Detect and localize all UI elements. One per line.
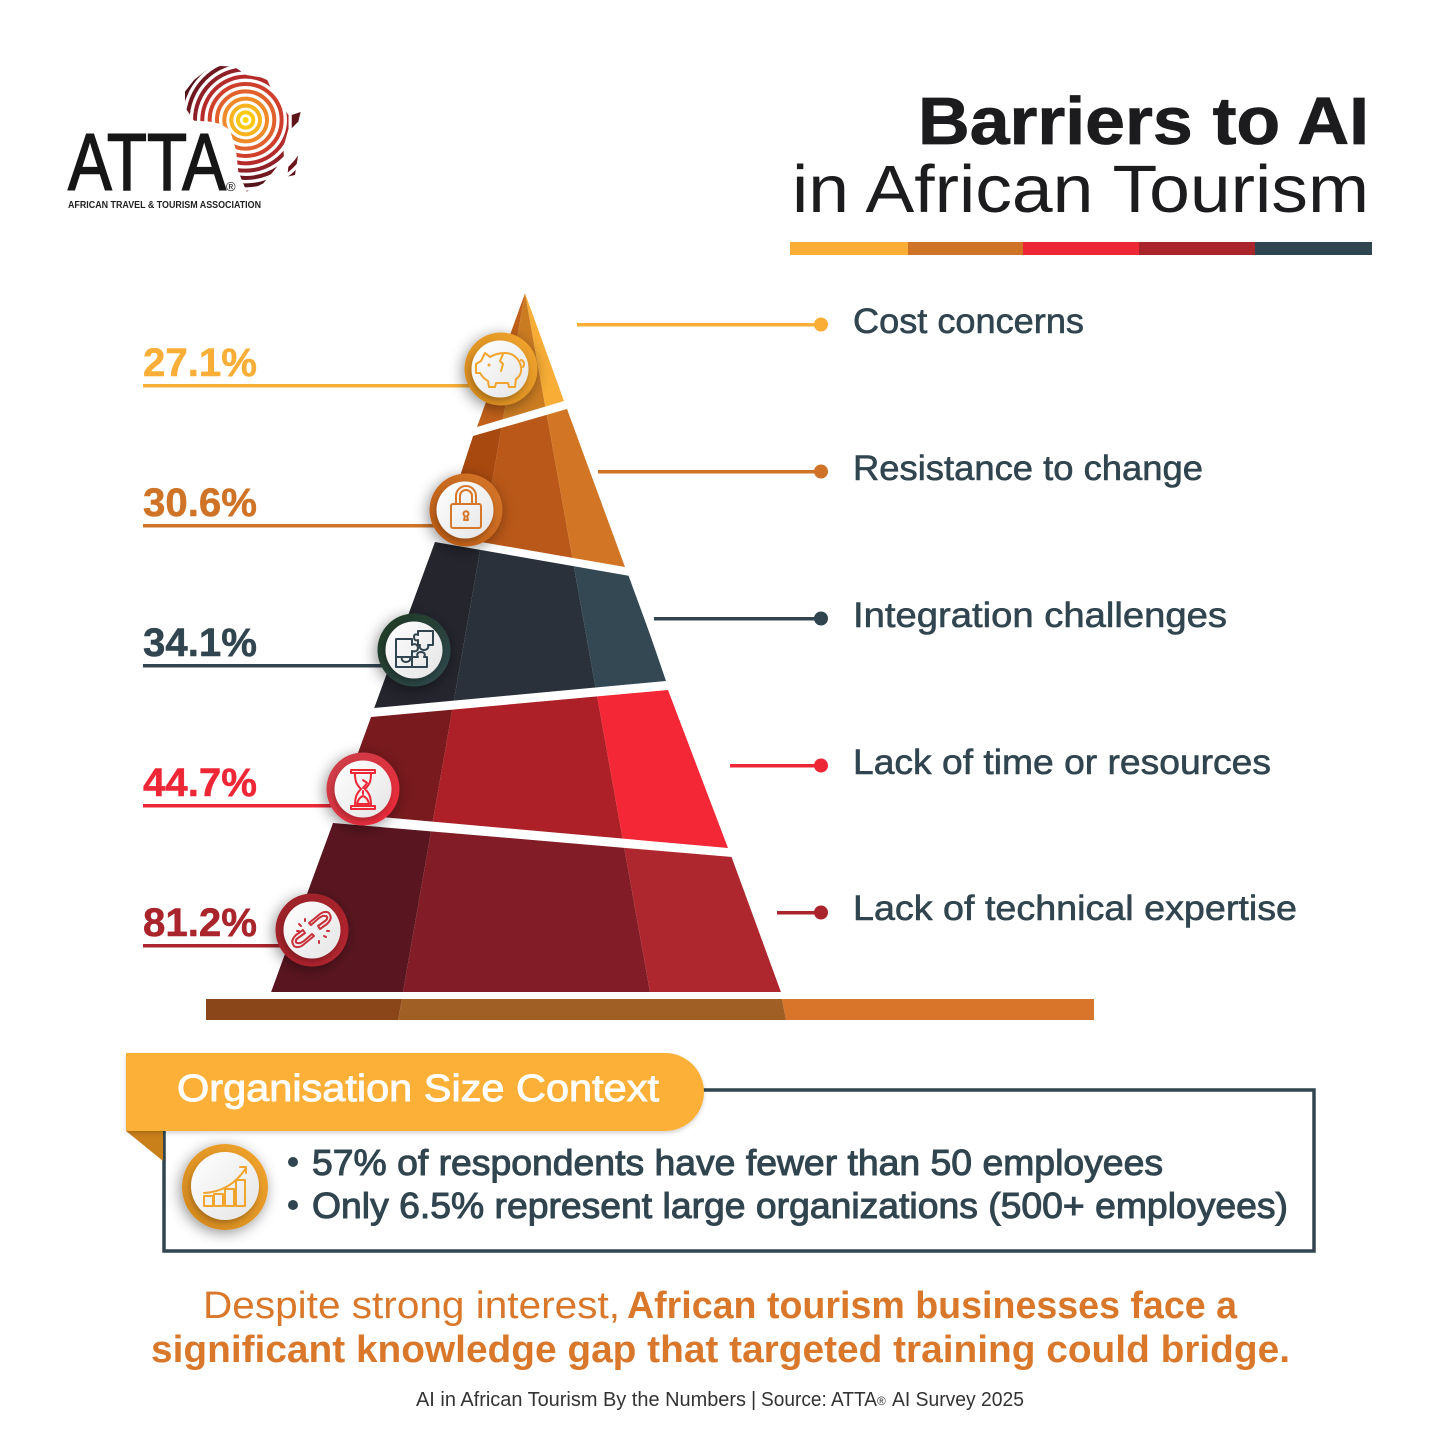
percentage: 27.1%: 27.1% bbox=[143, 341, 257, 385]
percentage: 34.1%: 34.1% bbox=[143, 621, 257, 665]
icon: growth chart bbox=[182, 1144, 268, 1230]
pyramid tier 1: cost concerns bbox=[477, 293, 564, 427]
percentage: 44.7%: 44.7% bbox=[143, 761, 257, 805]
source footer: Source: ATTA bbox=[761, 1389, 878, 1411]
banner bbox=[126, 1053, 704, 1131]
icon: puzzle pieces bbox=[378, 614, 450, 686]
percentage: 27.1% bbox=[143, 341, 473, 388]
bullet 2: Only 6.5% represent large organizations (500+ employees) bbox=[312, 1185, 1288, 1226]
percentage: 81.2%: 81.2% bbox=[143, 901, 257, 945]
source footer: | bbox=[751, 1389, 756, 1411]
pyramid tier 5: lack of technical expertise bbox=[271, 823, 781, 992]
label: lack of time or resources: Lack of time or resources bbox=[853, 743, 1271, 782]
icon: piggy bank bbox=[464, 332, 538, 406]
logo wordmark: ATTA bbox=[68, 118, 226, 208]
takeaway statement bbox=[151, 1285, 1290, 1371]
panel: organisation size context bbox=[126, 1053, 1314, 1251]
title line 2: in African Tourism bbox=[792, 152, 1369, 227]
takeaway bold text line 2: significant knowledge gap that targeted training could bridge. bbox=[151, 1329, 1290, 1371]
icon: broken chain bbox=[276, 894, 348, 966]
title line 1: Barriers to AI bbox=[918, 84, 1369, 159]
percentage: 30.6%: 30.6% bbox=[143, 481, 257, 525]
banner fold bbox=[126, 1131, 163, 1161]
pyramid chart bbox=[271, 293, 781, 992]
source footer: AI Survey 2025 bbox=[892, 1389, 1024, 1411]
bullet 1: 57% of respondents have fewer than 50 employees bbox=[312, 1142, 1163, 1183]
connector: cost concerns bbox=[577, 318, 828, 332]
percentage: 44.7% bbox=[143, 761, 333, 808]
percentage: 30.6% bbox=[143, 481, 438, 528]
logo registered mark: ® bbox=[226, 179, 236, 194]
label: integration challenges: Integration challenges bbox=[853, 596, 1227, 635]
icon: hourglass bbox=[326, 752, 400, 826]
label: lack of technical expertise: Lack of technical expertise bbox=[853, 889, 1297, 928]
logo tagline: AFRICAN TRAVEL & TOURISM ASSOCIATION bbox=[68, 200, 261, 211]
percentage: 34.1% bbox=[143, 621, 383, 668]
source footer bbox=[416, 1389, 1024, 1411]
banner heading: Organisation Size Context bbox=[177, 1068, 659, 1110]
pyramid base bar bbox=[206, 999, 1094, 1020]
pyramid tier 4: lack of time or resources bbox=[358, 690, 728, 848]
connector: lack of technical expertise bbox=[777, 906, 828, 920]
takeaway bold text line 1: African tourism businesses face a bbox=[627, 1285, 1238, 1327]
label: resistance to change: Resistance to change bbox=[853, 449, 1203, 488]
icon: Africa concentric rings bbox=[185, 66, 301, 192]
connector: resistance to change bbox=[598, 464, 828, 478]
bullet 1 marker bbox=[288, 1157, 298, 1167]
logo: ATTA bbox=[67, 66, 301, 208]
source footer: AI in African Tourism By the Numbers bbox=[416, 1389, 746, 1411]
connector: integration challenges bbox=[654, 612, 828, 626]
source footer: ® bbox=[877, 1394, 886, 1408]
pyramid tier 3: integration challenges bbox=[374, 542, 666, 708]
takeaway light text: Despite strong interest, bbox=[203, 1285, 620, 1327]
panel outline bbox=[164, 1090, 1314, 1251]
title colour bar bbox=[790, 242, 1372, 255]
bullet 2 marker bbox=[288, 1200, 298, 1210]
pyramid tier 2: resistance to change bbox=[460, 409, 625, 567]
title bbox=[792, 84, 1369, 227]
connector: lack of time or resources bbox=[730, 758, 828, 772]
icon: padlock bbox=[430, 474, 502, 546]
label: cost concerns: Cost concerns bbox=[853, 302, 1084, 341]
